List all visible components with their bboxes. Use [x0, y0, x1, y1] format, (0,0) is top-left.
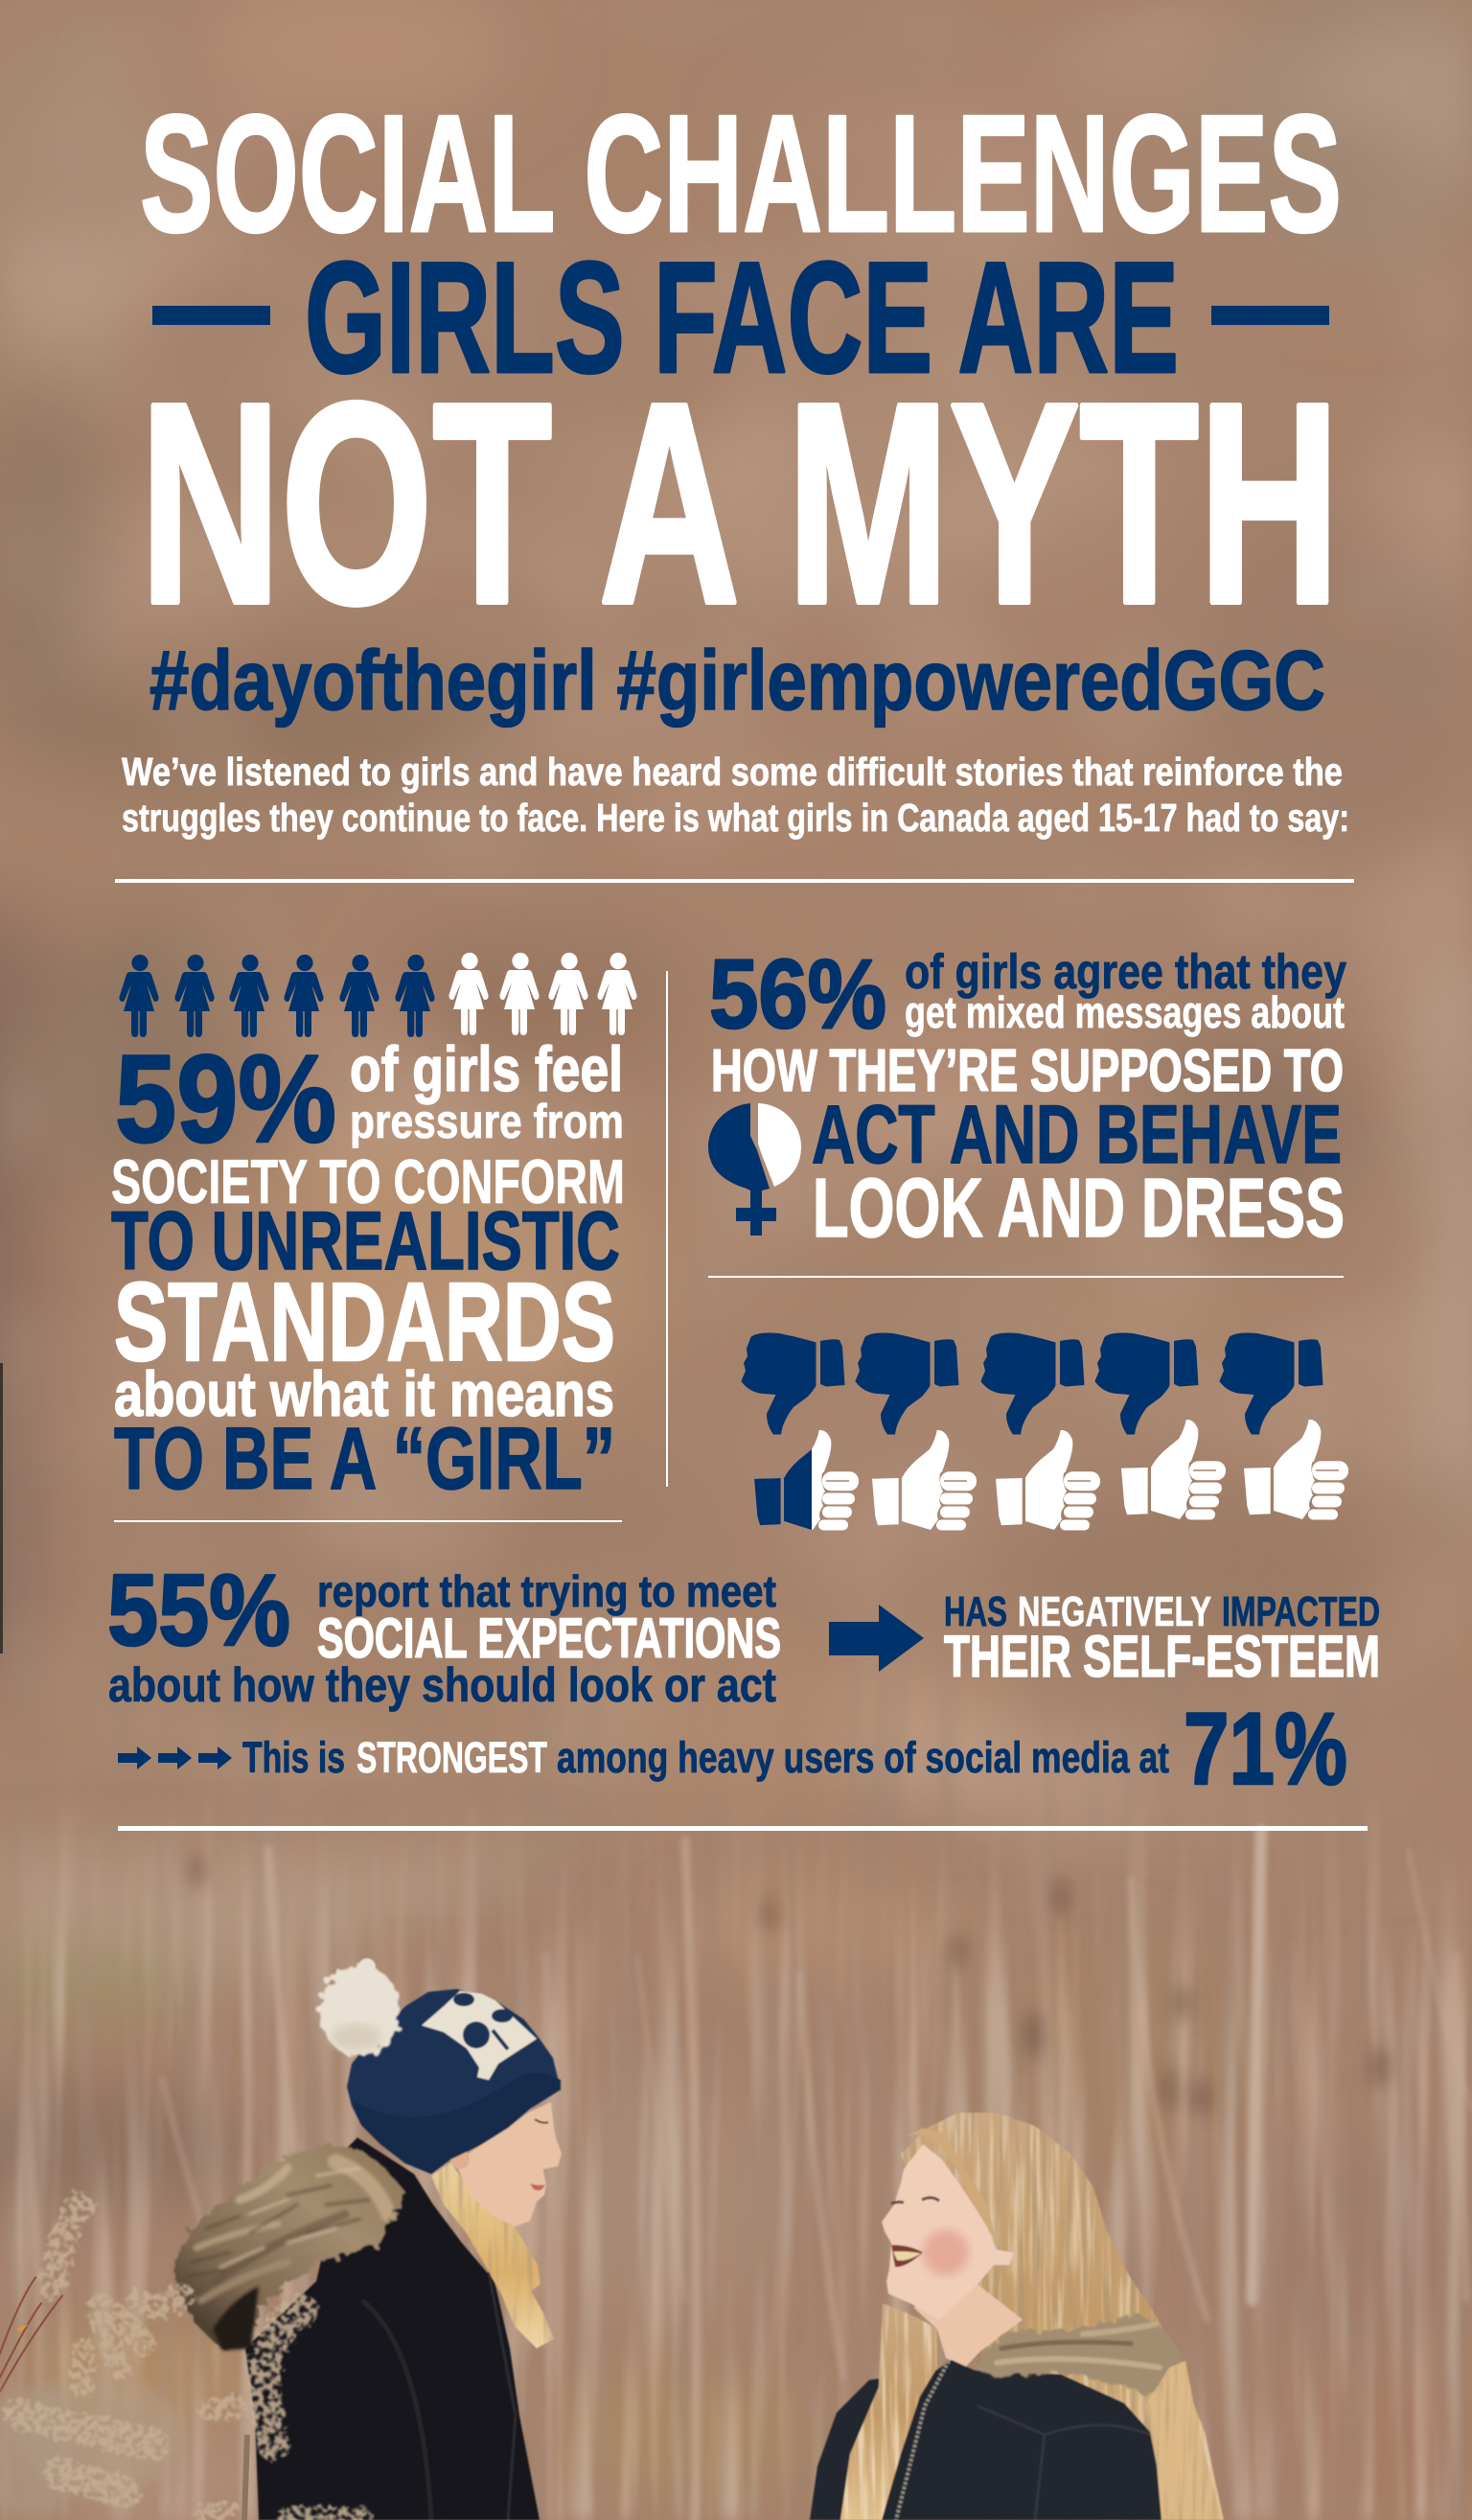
text: standards: STANDARDS [114, 1260, 615, 1384]
statistic: 55%: 55% [107, 1554, 290, 1667]
icon: three small arrows [118, 1746, 232, 1769]
icon: thumbs down and up rows [741, 1332, 1348, 1530]
text: has negatively impacted: NEGATIVELY [1018, 1588, 1211, 1635]
face [882, 2144, 1014, 2320]
text: to unrealistic: TO UNREALISTIC [111, 1195, 620, 1287]
fur hood [172, 2144, 405, 2350]
text: to be a girl: TO BE A “GIRL” [114, 1410, 615, 1508]
panel: 59% statistic [111, 953, 637, 1508]
text: this is strongest among heavy users: STRONGEST [356, 1733, 547, 1782]
hat pattern [422, 1991, 537, 2080]
text: of girls feel pressure from: pressure from [350, 1095, 624, 1148]
face [455, 2102, 562, 2227]
text: has negatively impacted [944, 1588, 1380, 1635]
zipper [896, 2361, 949, 2520]
panel: 71% social media statistic [118, 1691, 1347, 1806]
statistic: 59%: 59% [115, 1029, 336, 1168]
text: social expectations: SOCIAL EXPECTATIONS [317, 1607, 781, 1670]
hair right side over shoulder [1145, 2361, 1221, 2520]
text: has negatively impacted: IMPACTED [1222, 1588, 1380, 1635]
photo: dried goldenrod plants [0, 2205, 362, 2520]
panel: 56% statistic [708, 939, 1347, 1255]
icon: row of ten girl pictograms [119, 953, 637, 1037]
icon: half-filled thumb up [754, 1430, 859, 1530]
hair back [901, 2113, 1224, 2520]
hair [431, 2162, 554, 2348]
photo: girl in hat, left [172, 1958, 562, 2520]
hair front strands [840, 2303, 937, 2520]
fur collar [976, 2313, 1185, 2393]
text: of girls agree that they: of girls agree that they [905, 944, 1347, 999]
icon: female symbol pie chart 56% [708, 1103, 801, 1236]
jacket [810, 2360, 1166, 2520]
icon: four thumbs up [872, 1420, 1348, 1530]
background: lower photo hillside and bare trees [0, 1783, 1472, 2520]
pompom [319, 1958, 400, 2056]
statistic: 71%: 71% [1184, 1691, 1347, 1806]
panel: 55% statistic [107, 1554, 1380, 1712]
text: of girls feel pressure from: of girls feel [350, 1033, 623, 1104]
text: report that trying to meet: report that trying to meet [317, 1566, 776, 1616]
background: blurred autumn hillside photo [0, 0, 1472, 1859]
text: get mixed messages about: get mixed messages about [905, 987, 1345, 1037]
text: society to conform: SOCIETY TO CONFORM [111, 1146, 625, 1216]
neck [913, 2284, 1023, 2368]
intro paragraph [122, 750, 1349, 840]
text: this is strongest among heavy users: This is [242, 1733, 345, 1782]
text: has negatively impacted: HAS [944, 1588, 1007, 1635]
jacket [245, 2138, 540, 2520]
text: this is strongest among heavy users [242, 1733, 1169, 1782]
photo: smiling blonde girl, right [810, 2113, 1224, 2520]
icon: five thumbs down [741, 1332, 1322, 1434]
text: about what it means: about what it means [114, 1358, 614, 1429]
hat [347, 1989, 561, 2174]
arrow [829, 1605, 924, 1672]
statistic: 56%: 56% [709, 939, 886, 1049]
text: about how they should look or act: about how they should look or act [108, 1658, 776, 1712]
text: of girls feel pressure from [350, 1033, 624, 1148]
text: this is strongest among heavy users: among heavy users of social media at [557, 1733, 1169, 1782]
